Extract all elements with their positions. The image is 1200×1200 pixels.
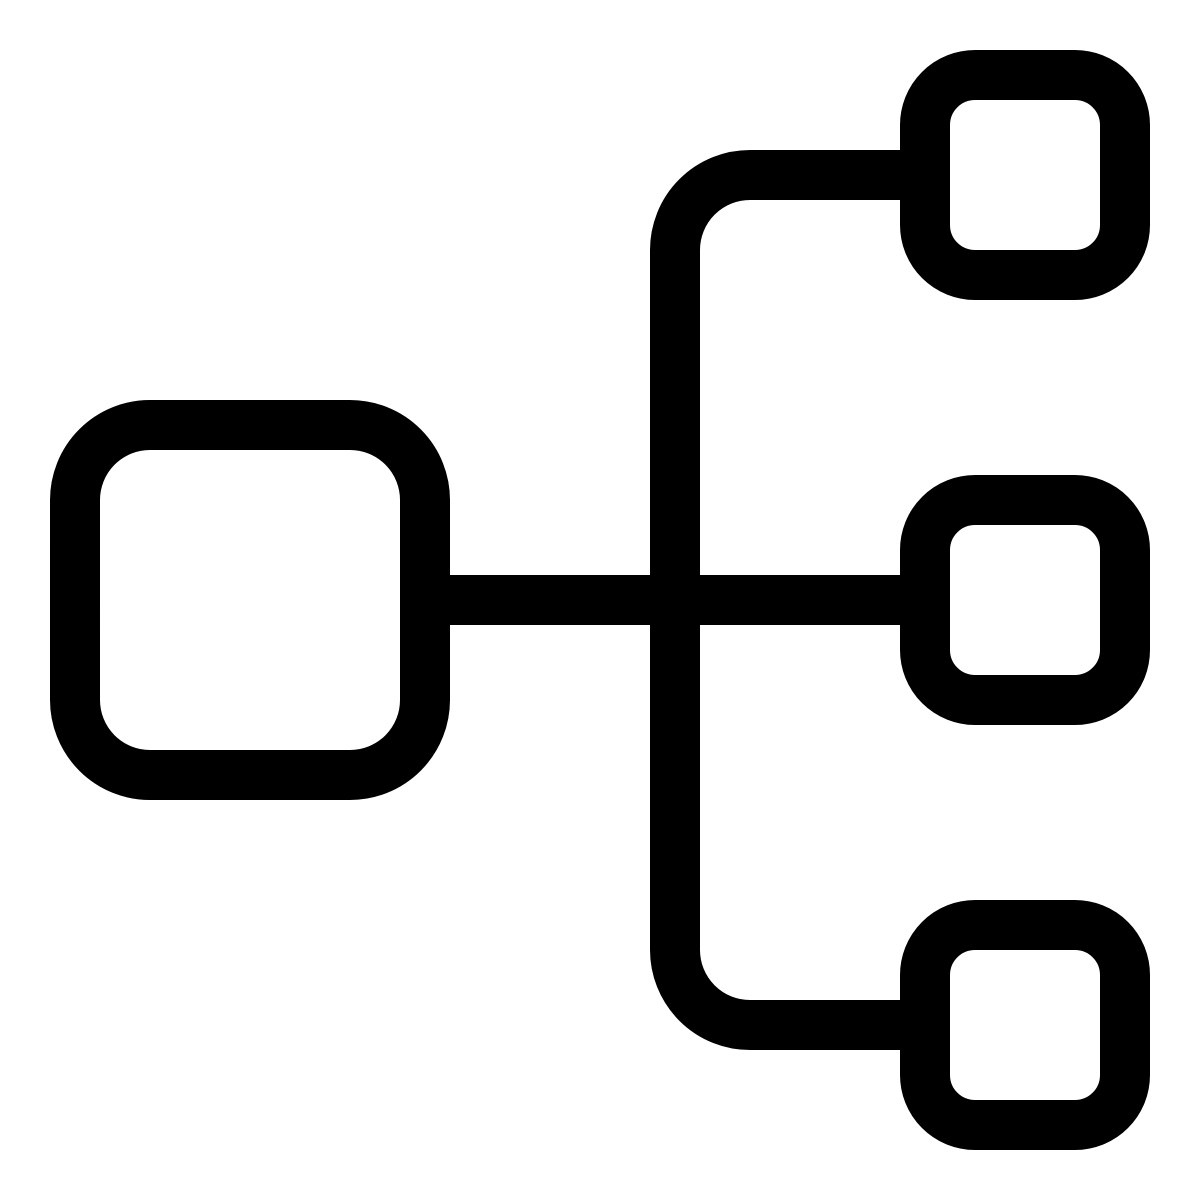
icon: top child box xyxy=(925,75,1125,275)
icon: middle child box xyxy=(925,500,1125,700)
icon: branch trunk xyxy=(675,175,925,1025)
icon: bottom child box xyxy=(925,925,1125,1125)
icon: root node box xyxy=(75,425,425,775)
icon: horizontal connector xyxy=(425,575,925,625)
